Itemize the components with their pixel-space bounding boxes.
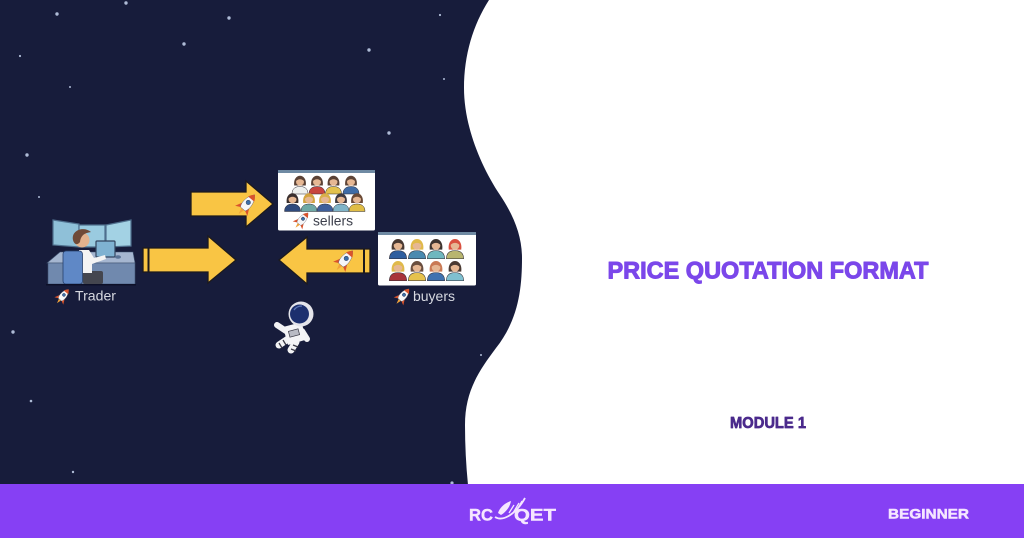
icon: trader at desk bbox=[46, 220, 136, 286]
icon: astronaut bbox=[277, 302, 314, 351]
panel: buyers bbox=[378, 232, 476, 286]
footer bar bbox=[0, 484, 1024, 538]
label: buyers: buyers bbox=[413, 288, 455, 304]
white curved panel bbox=[464, 0, 1024, 485]
logo: Rocket bbox=[469, 498, 556, 524]
logo: Rocket: QET bbox=[514, 506, 556, 524]
arrow: to sellers bbox=[191, 181, 273, 227]
label: Trader bbox=[53, 286, 116, 307]
title: PRICE QUOTATION FORMAT bbox=[608, 258, 929, 284]
label: Trader: Trader bbox=[75, 288, 116, 304]
logo: Rocket: RC bbox=[469, 506, 493, 524]
arrow: trader to market bbox=[143, 236, 236, 283]
panel: sellers bbox=[278, 170, 375, 232]
panel: sellers: sellers bbox=[313, 212, 353, 228]
label: buyers bbox=[392, 285, 455, 308]
level label: BEGINNER bbox=[888, 506, 969, 522]
star field bbox=[11, 1, 482, 485]
arrow: buyers to market bbox=[279, 237, 370, 284]
module label: MODULE 1 bbox=[730, 415, 806, 432]
